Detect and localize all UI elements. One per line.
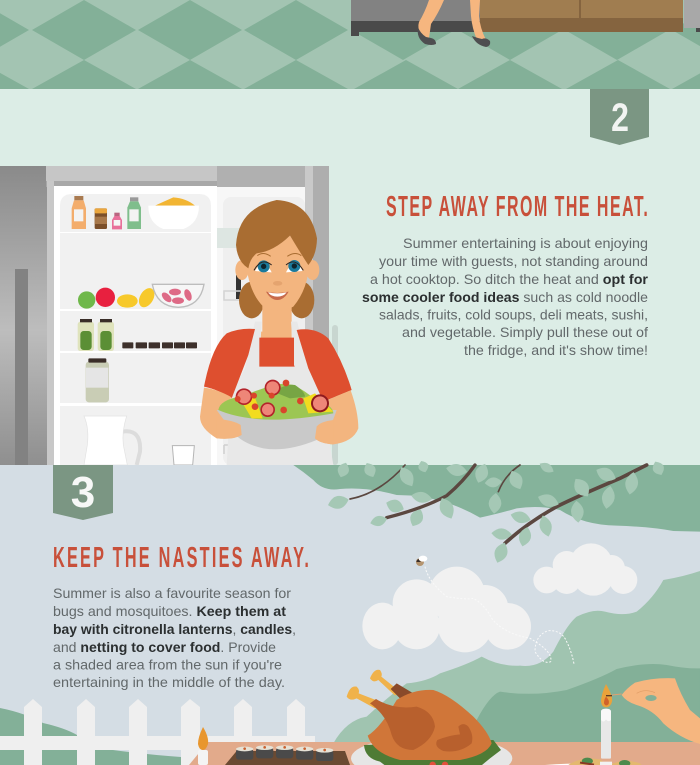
left hill behind fence	[0, 708, 181, 765]
turkey body	[368, 690, 492, 760]
red top	[204, 329, 352, 402]
food plate	[545, 758, 642, 765]
leg joints	[391, 683, 413, 698]
nose	[273, 281, 282, 286]
section 2 body text: the fridge, and it's show time!	[464, 343, 648, 358]
pickle jars	[78, 319, 114, 351]
garnish	[429, 762, 448, 765]
section 3 background	[0, 465, 700, 765]
chocolates	[122, 342, 197, 348]
fly trail	[425, 567, 574, 664]
section 3 heading: KEEP THE NASTIES AWAY.	[53, 541, 309, 573]
branches	[350, 465, 647, 543]
kitchen cabinets and woman's legs	[351, 0, 700, 47]
plate	[351, 736, 512, 765]
smile	[266, 292, 289, 300]
section 3 body text: Summer is also a favourite season for	[53, 586, 291, 601]
badge: number 3: 3	[71, 468, 95, 517]
section 2 background	[0, 89, 700, 465]
section 2 body text: a hot cooktop. So ditch the heat and opt for	[370, 272, 649, 287]
section 2 body text: your time with guests, not standing around	[379, 254, 648, 269]
brown jar	[95, 208, 107, 229]
glass	[172, 446, 194, 465]
face	[246, 236, 309, 311]
section 3 body text: bugs and mosquitoes. Keep them at	[53, 604, 286, 619]
outdoor scene	[293, 459, 700, 743]
ears	[235, 260, 319, 280]
sushi board	[225, 745, 350, 765]
candle	[600, 709, 612, 765]
small cloud	[533, 543, 637, 596]
hand	[622, 678, 700, 744]
pitcher	[84, 416, 140, 465]
salad bowl	[217, 380, 337, 449]
orange bottle	[72, 196, 86, 229]
refrigerator	[0, 166, 338, 465]
left candle	[198, 727, 208, 765]
badge: number 2: 2	[611, 95, 629, 140]
section 3 body text: entertaining in the middle of the day.	[53, 675, 285, 690]
woman holding salad bowl	[200, 200, 358, 465]
roast turkey on plate	[347, 670, 512, 765]
section 3 body text: a shaded area from the sun if you're	[53, 658, 282, 672]
flame	[601, 684, 612, 707]
eyes	[254, 253, 303, 272]
large cloud	[362, 567, 531, 652]
white picket fence	[0, 699, 315, 765]
green bottle	[127, 197, 141, 229]
right candle, plate and hand	[545, 678, 700, 765]
apron	[227, 322, 333, 465]
section 3 body text: bay with citronella lanterns , candles,	[53, 622, 296, 637]
large jar	[86, 358, 109, 402]
section 3 body text: and netting to cover food . Provide	[53, 640, 276, 655]
section 2 heading: STEP AWAY FROM THE HEAT.	[386, 190, 648, 222]
lettuce	[364, 740, 501, 765]
neck and shoulders	[248, 302, 308, 345]
hair back	[239, 282, 314, 318]
fly	[416, 556, 427, 566]
fridge contents	[72, 196, 204, 465]
section 2 body text: some cooler food ideas such as cold noodle	[362, 290, 648, 305]
drumstick	[370, 699, 435, 750]
white bowl with food	[148, 197, 199, 229]
near hill	[477, 664, 700, 743]
hands over bowl	[217, 419, 333, 444]
far hill	[333, 571, 700, 743]
hair top	[236, 200, 317, 268]
section 2 body text: Summer entertaining is about enjoying	[403, 236, 648, 251]
section 2 body text	[362, 236, 649, 358]
section 3 body text	[53, 586, 296, 690]
tree canopy	[293, 465, 700, 532]
sushi rolls	[236, 745, 333, 761]
bones	[347, 670, 400, 708]
section 2 body text: salads, fruits, cold soups, deli meats, sushi,	[379, 308, 648, 322]
fruit and glass bowl	[78, 284, 204, 310]
section 2 body text: and vegetable. Simply pull these out of	[402, 325, 648, 340]
leaves	[326, 459, 667, 565]
table	[189, 742, 700, 765]
arms and hands	[200, 388, 358, 444]
badge: number 2	[590, 89, 649, 145]
pink bottle	[112, 213, 122, 229]
match stick	[612, 694, 622, 695]
section 1: kitchen floor	[0, 0, 700, 89]
badge: number 3	[53, 465, 113, 520]
wing	[436, 724, 472, 751]
